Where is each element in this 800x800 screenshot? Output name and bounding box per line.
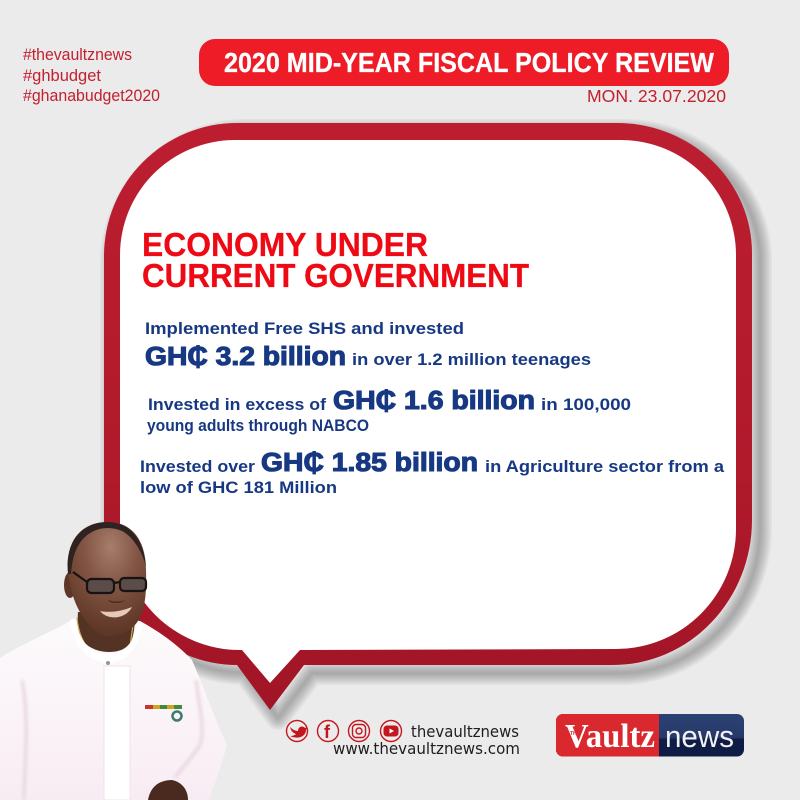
neck bbox=[78, 612, 135, 652]
text block: NABCO: Invested in excess of bbox=[148, 396, 327, 414]
text block: agriculture: Invested over bbox=[140, 458, 256, 476]
icon: facebook: f bbox=[324, 722, 331, 742]
hand bbox=[148, 780, 188, 800]
text block: free SHS bbox=[145, 320, 591, 371]
social handle and website bbox=[333, 722, 520, 758]
shirt folds bbox=[22, 680, 202, 800]
portrait: finance minister in white shirt bbox=[0, 522, 227, 800]
placket bbox=[104, 666, 130, 800]
social handle and website: www.thevaultznews.com bbox=[333, 739, 520, 758]
icon: twitter bbox=[286, 720, 308, 742]
hashtags: #ghanabudget2020 bbox=[23, 87, 160, 105]
heading: ECONOMY UNDER bbox=[142, 226, 428, 263]
speech bubble bbox=[104, 123, 760, 718]
shirt bbox=[0, 620, 227, 800]
text block: NABCO: in 100,000 bbox=[541, 396, 631, 414]
date: MON. 23.07.2020 bbox=[587, 86, 726, 106]
icon: instagram bbox=[348, 720, 370, 742]
logo: Vaultz news: Vaultz bbox=[565, 718, 655, 755]
pocket badge bbox=[172, 712, 182, 720]
heading: CURRENT GOVERNMENT bbox=[142, 257, 529, 294]
pocket kente strip bbox=[145, 705, 182, 709]
social icons bbox=[286, 720, 402, 742]
nose bbox=[108, 600, 125, 603]
text block: agriculture: low of GHC 181 Million bbox=[140, 479, 337, 497]
text block: free SHS: GH₵ 3.2 billion bbox=[145, 343, 346, 371]
hashtags bbox=[23, 46, 160, 105]
smile bbox=[100, 607, 132, 617]
text block: free SHS: in over 1.2 million teenages bbox=[352, 351, 591, 369]
hashtags: #ghbudget bbox=[23, 67, 101, 85]
logo: Vaultz news bbox=[556, 714, 744, 756]
icon: youtube bbox=[380, 720, 402, 742]
text block: NABCO: young adults through NABCO bbox=[147, 417, 369, 435]
text block: agriculture: GH₵ 1.85 billion bbox=[261, 449, 478, 477]
hair bbox=[68, 522, 146, 574]
logo: Vaultz news: news bbox=[665, 719, 734, 754]
glasses bbox=[73, 572, 146, 593]
social handle and website: thevaultznews bbox=[411, 722, 519, 741]
collar bbox=[70, 618, 142, 663]
logo: Vaultz news: THE bbox=[570, 731, 581, 737]
gold necklace bbox=[77, 618, 133, 646]
text block: NABCO: GH₵ 1.6 billion bbox=[333, 387, 535, 415]
head bbox=[68, 522, 146, 636]
ear bbox=[64, 572, 76, 598]
text block: NABCO bbox=[147, 387, 631, 435]
text block: free SHS: Implemented Free SHS and invested bbox=[145, 320, 464, 338]
hashtags: #thevaultznews bbox=[23, 46, 132, 64]
text block: agriculture bbox=[140, 449, 725, 497]
button bbox=[106, 661, 110, 665]
heading bbox=[142, 226, 529, 294]
title banner bbox=[199, 39, 729, 86]
title banner: 2020 MID-YEAR FISCAL POLICY REVIEW bbox=[224, 47, 715, 78]
text block: agriculture: in Agriculture sector from a bbox=[485, 458, 725, 476]
